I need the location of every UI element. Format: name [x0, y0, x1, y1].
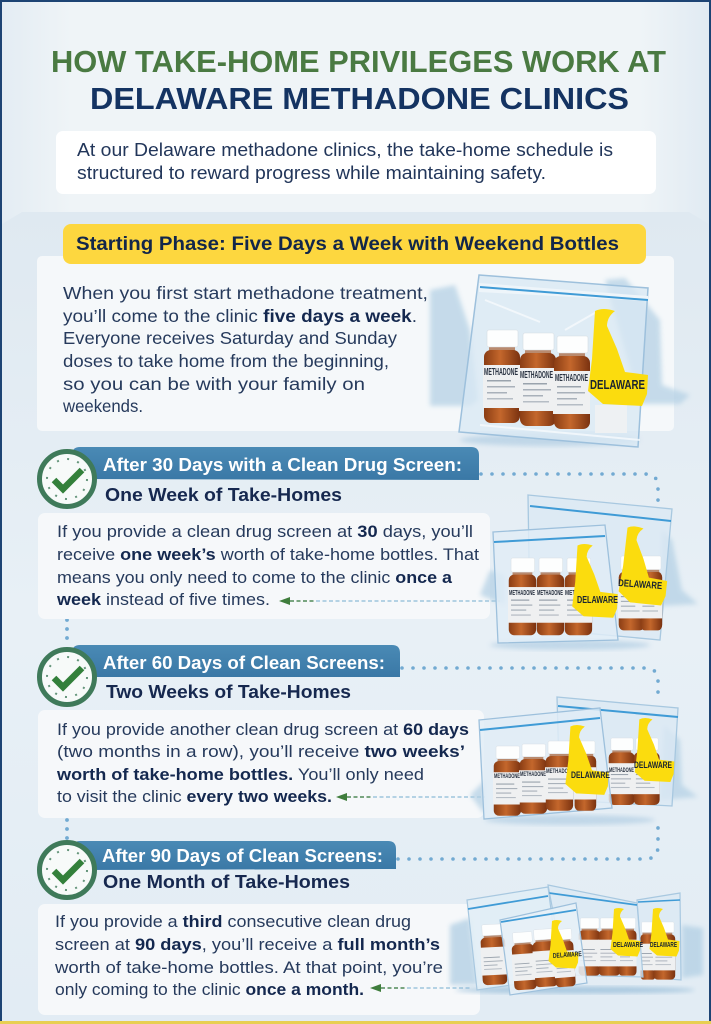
illustration: two bags: METHADO: [546, 768, 568, 775]
starting phase body text: Everyone receives Saturday and Sunday: [63, 328, 397, 348]
step 2: after 60 days: [38, 645, 698, 825]
content backdrop panel: [2, 212, 709, 1024]
heading bar: starting phase: [63, 224, 646, 264]
intro text: structured to reward progress while maintaining safety.: [77, 163, 546, 183]
step 1 text card: receive one week’s worth of take-home bottles. That: [57, 545, 479, 564]
step 3 text card: only coming to the clinic once a month.: [55, 980, 364, 999]
title line: how take-home privileges work at: HOW TAKE-HOME PRIVILEGES WORK AT: [51, 45, 666, 79]
step 3 text card: [38, 904, 480, 1015]
illustration: two bags: METHADONE: [537, 590, 563, 597]
step 2 subheading: Two Weeks of Take-Homes: [106, 682, 351, 702]
illustration: four bags: DELAWARE: [650, 942, 677, 949]
illustration: bag with three bottles: [430, 275, 690, 447]
illustration: two bags: DELAWARE: [634, 760, 672, 771]
dotted connector: step 2 to right side: [402, 668, 658, 703]
step 2 text card: If you provide another clean drug screen at 60 days: [57, 720, 469, 739]
bottom accent strip: [0, 1021, 711, 1024]
starting phase body text: so you can be with your family on: [63, 374, 365, 394]
starting phase body text: [62, 283, 428, 416]
starting phase body text: doses to take home from the beginning,: [63, 351, 389, 371]
step 2 ribbon: [72, 645, 400, 677]
illustration: two bags: METHADONE: [509, 590, 535, 597]
dotted connector: step 1 to right side: [481, 474, 658, 503]
illustration: two bags: METH: [565, 590, 579, 597]
illustration: two bags: DELAWARE: [571, 770, 610, 781]
arrow: step 1: [279, 597, 500, 605]
step 3: after 90 days: [38, 841, 703, 1015]
step 1 text card: means you only need to come to the clinic once a: [57, 568, 453, 587]
step 1 text card: week instead of five times.: [56, 590, 270, 609]
step 3 text card: If you provide a third consecutive clean drug: [55, 912, 411, 931]
step 2 text card: worth of take-home bottles. You’ll only need: [56, 765, 424, 784]
starting phase body text: weekends.: [62, 396, 143, 416]
step 1 text card: If you provide a clean drug screen at 30 days, you’ll: [57, 522, 473, 541]
icon: step 1 clock check: [40, 452, 94, 506]
illustration: two bags: METHADONE: [494, 773, 520, 780]
icon: step 3 clock check: [40, 842, 94, 898]
illustration: four bags: DELAWARE: [553, 951, 582, 960]
illustration: two bags: [470, 697, 698, 825]
intro text: At our Delaware methadone clinics, the take-home schedule is: [77, 140, 613, 160]
intro card: [56, 131, 656, 194]
illustration: bag with three bottles: METHADONE: [555, 373, 588, 384]
step 3 ribbon: After 90 Days of Clean Screens:: [102, 846, 383, 866]
illustration: four bags: [450, 885, 703, 995]
illustration: bag with three bottles: METHADONE: [484, 367, 518, 378]
step 2 ribbon: After 60 Days of Clean Screens:: [103, 653, 385, 673]
illustration: two bags: METHADONE: [609, 767, 634, 774]
arrow: step 3: [370, 984, 470, 992]
illustration: bag with three bottles: DELAWARE: [590, 377, 645, 392]
step 1 text card: [38, 513, 490, 619]
illustration: two bags: [480, 495, 698, 650]
icon: step 2 clock check: [40, 650, 94, 704]
panel: starting phase: [37, 224, 690, 447]
step 1 subheading: One Week of Take-Homes: [105, 485, 342, 505]
starting phase body text: When you first start methadone treatment,: [63, 283, 428, 303]
dotted connector: step 1 to step 2: [65, 620, 69, 646]
illustration: four bags: DELAWARE: [613, 942, 643, 949]
illustration: two bags: METHADONE: [520, 771, 546, 778]
title line: delaware methadone clinics: DELAWARE METHADONE CLINICS: [90, 82, 629, 116]
step 2 text card: (two months in a row), you’ll receive two weeks’: [57, 742, 465, 761]
arrow: step 2: [336, 793, 485, 801]
step 3 text card: screen at 90 days , you’ll receive a full month’s: [55, 935, 440, 954]
step 2 text card: [38, 710, 484, 818]
step 1 ribbon: [72, 447, 479, 480]
step 1: after 30 days: [38, 447, 698, 650]
starting phase body text: you’ll come to the clinic five days a week .: [63, 306, 417, 326]
title: [51, 45, 666, 116]
illustration: two bags: DELAWARE: [577, 595, 618, 606]
intro text: [77, 140, 613, 183]
step 1 ribbon: After 30 Days with a Clean Drug Screen:: [103, 455, 462, 475]
step 3 subheading: One Month of Take-Homes: [103, 872, 350, 892]
step 3 ribbon: [72, 841, 396, 870]
step 3 text card: worth of take-home bottles. At that point, you’re: [54, 958, 443, 977]
heading bar: starting phase: Starting Phase: Five Days a Week with Weekend Bottles: [76, 233, 619, 255]
illustration: two bags: DELAWARE: [618, 578, 663, 592]
dotted connector: step 2 to step 3: [65, 820, 69, 842]
illustration: bag with three bottles: METHADONE: [520, 370, 553, 381]
step 2 text card: to visit the clinic every two weeks.: [57, 787, 332, 806]
dotted connector: step 3 to right side: [398, 826, 658, 859]
illustration: two bags: METHADONE: [620, 585, 644, 592]
